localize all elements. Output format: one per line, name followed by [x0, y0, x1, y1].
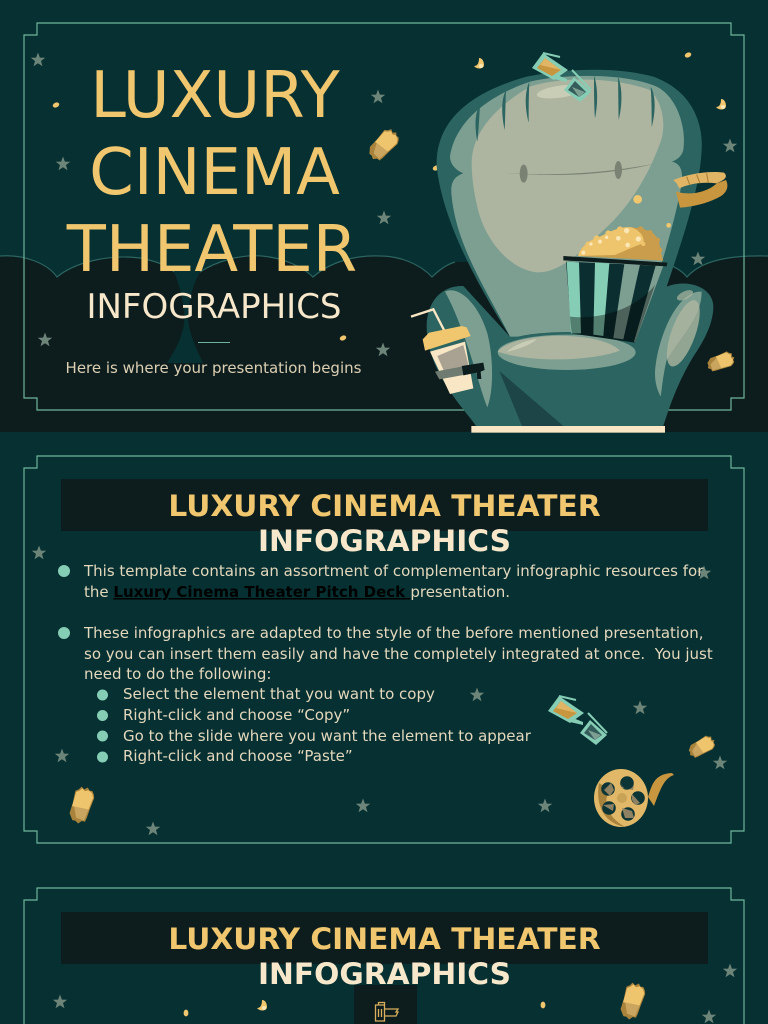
heading	[168, 489, 601, 559]
curtain scallop line	[0, 256, 768, 277]
headrest glint	[536, 82, 584, 101]
heading: LUXURY CINEMA THEATER	[168, 922, 601, 957]
heading bar	[61, 479, 708, 531]
bullet list: Select the element that you want to copy	[123, 685, 435, 703]
panel: cover	[0, 23, 768, 433]
bullet list: Right-click and choose “Paste”	[123, 747, 353, 765]
icon: popcorn wrap small	[705, 349, 737, 375]
illustration: armchair with popcorn	[411, 70, 736, 433]
bullet list: Right-click and choose “Copy”	[123, 706, 350, 724]
bullet list: need to do the following:	[84, 665, 271, 683]
icon: film strip ring	[673, 172, 727, 208]
title: CINEMA	[89, 136, 340, 210]
seat shadow	[499, 371, 563, 426]
star	[691, 252, 704, 264]
icon: 3D glasses	[532, 53, 591, 102]
tagline: Here is where your presentation begins	[66, 359, 362, 377]
icon: popcorn wrap	[365, 125, 403, 165]
dark theater floor	[0, 256, 768, 432]
central column	[167, 272, 203, 363]
subtitle: INFOGRAPHICS	[86, 287, 342, 327]
stars	[32, 546, 727, 835]
upholstery tufts	[476, 75, 655, 142]
seat cushion	[493, 332, 641, 370]
icon: 3D glasses	[548, 696, 607, 745]
title: THEATER	[66, 213, 357, 287]
seam and buttons	[497, 161, 655, 183]
heading	[168, 922, 601, 992]
panel: instructions	[24, 456, 744, 843]
icon: drink cup	[411, 309, 485, 394]
base	[471, 426, 665, 433]
popcorn bucket	[563, 226, 667, 343]
popcorn kernels	[181, 1000, 548, 1018]
heading: INFOGRAPHICS	[258, 957, 511, 992]
popcorn kernels	[52, 51, 726, 342]
title	[66, 59, 357, 287]
panel frame	[24, 888, 744, 1024]
icon: film reel	[594, 769, 674, 827]
right arm	[655, 288, 707, 397]
chair body	[427, 70, 713, 426]
cover frame	[24, 23, 744, 410]
panel: next slide	[24, 888, 744, 1024]
heading: INFOGRAPHICS	[258, 524, 511, 559]
left arm	[445, 290, 492, 407]
icon: popcorn wrap	[68, 785, 96, 826]
left floor scallop	[432, 262, 485, 290]
panel frame	[24, 456, 744, 843]
bullet list: Go to the slide where you want the element to appear	[123, 727, 532, 745]
bullet list: These infographics are adapted to the style of the before mentioned presentation,	[83, 624, 704, 642]
star	[724, 139, 736, 151]
stars	[53, 964, 737, 1023]
bullet list: This template contains an assortment of complementary infographic resources for	[83, 562, 704, 580]
heading: LUXURY CINEMA THEATER	[168, 489, 601, 524]
icon box	[354, 985, 417, 1024]
bullet list	[58, 562, 713, 765]
heading bar	[61, 912, 708, 964]
icon: popcorn wrap	[619, 981, 647, 1022]
stars	[31, 52, 737, 356]
title: LUXURY	[90, 59, 341, 133]
icon: popcorn wrap small	[686, 732, 718, 762]
chair back	[450, 76, 684, 337]
falling kernels	[633, 195, 671, 228]
right floor scallop	[640, 258, 687, 290]
icon: film roll	[376, 1002, 398, 1021]
chair back highlight	[472, 80, 663, 272]
bullet list: the Luxury Cinema Theater Pitch Deck presentation.	[84, 583, 510, 601]
divider	[198, 342, 230, 343]
bullet list: so you can insert them easily and have the completely integrated at once. You just	[84, 645, 713, 663]
